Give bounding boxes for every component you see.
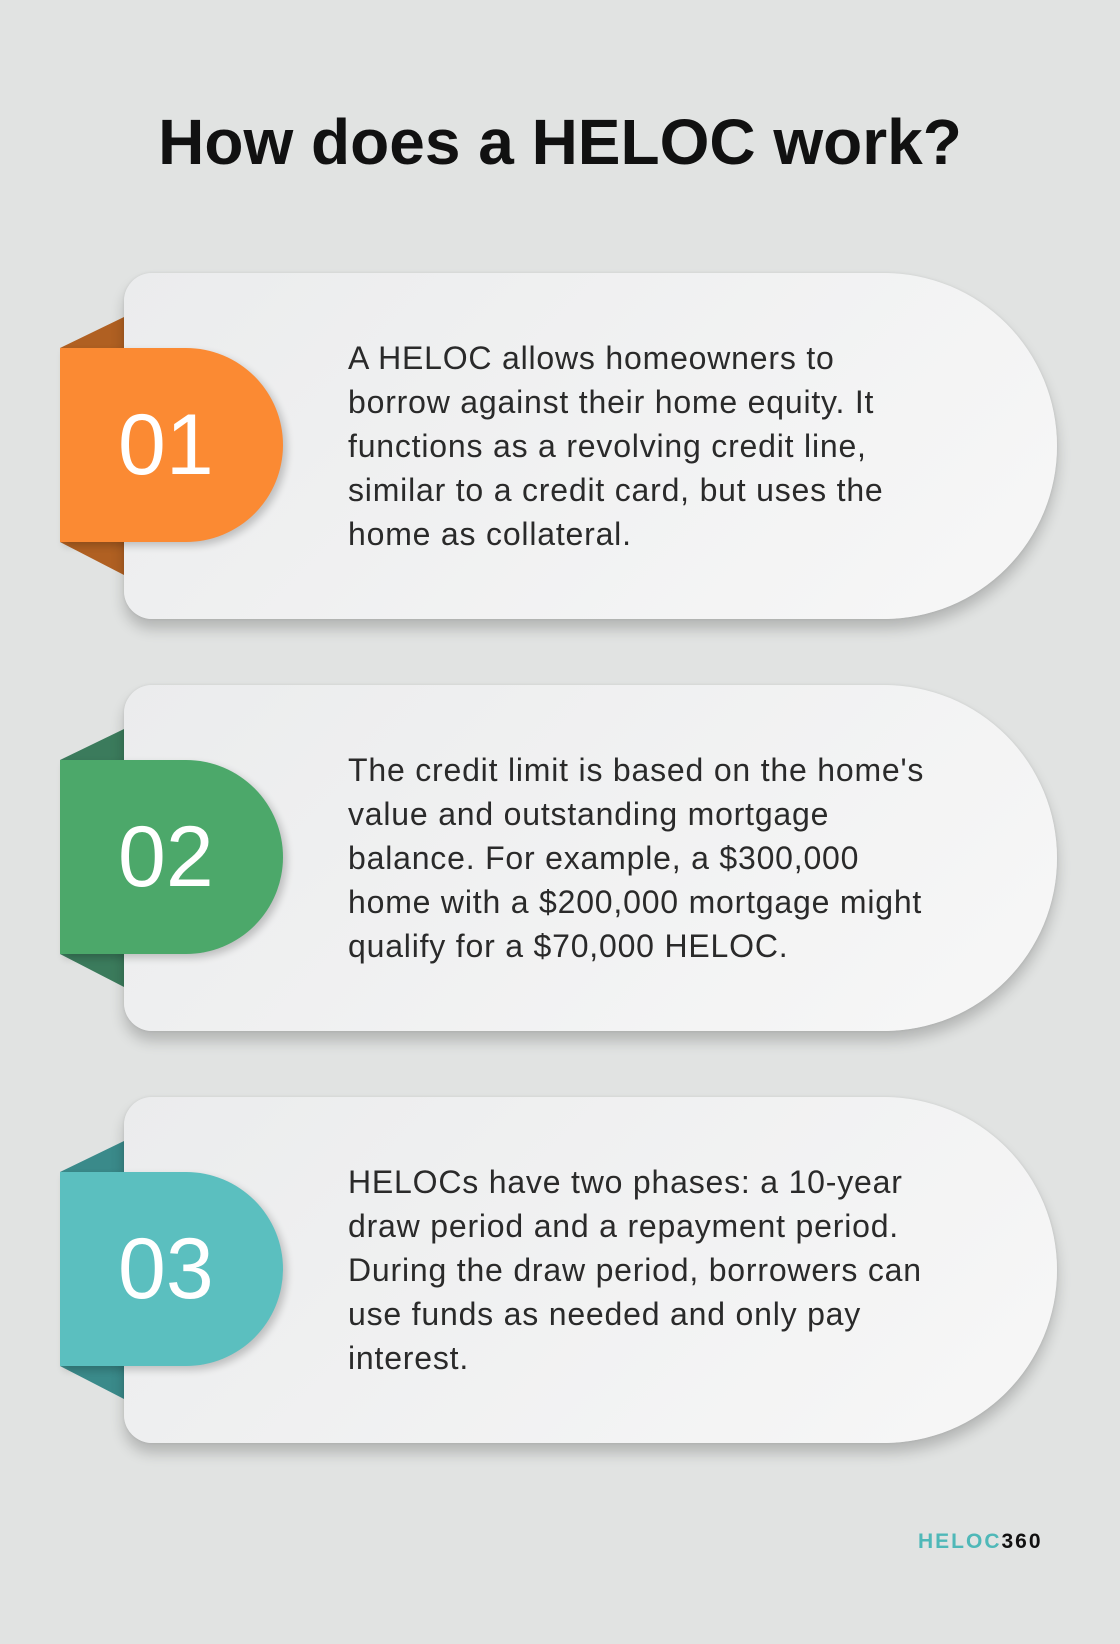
fold: step 3 xyxy=(60,1141,124,1399)
text: step 3: interest. xyxy=(348,1340,469,1376)
text: step 2: balance. For example, a $300,000 xyxy=(348,840,859,876)
panel: step 2 xyxy=(60,684,1062,1047)
panel: step 1 xyxy=(60,272,1062,635)
text: step 2: qualify for a $70,000 HELOC. xyxy=(348,928,788,964)
text: step 1: home as collateral. xyxy=(348,516,632,552)
text: step 1 xyxy=(348,340,884,552)
text: step 2: The credit limit is based on the home's xyxy=(348,752,924,788)
fold: step 1 xyxy=(60,317,124,575)
text: step 3 xyxy=(348,1164,922,1376)
badge: 02 xyxy=(60,760,283,954)
text: step 1: functions as a revolving credit line, xyxy=(348,428,867,464)
text: step 3: During the draw period, borrowers can xyxy=(348,1252,922,1288)
card: step 3 xyxy=(124,1097,1057,1443)
text: step 1: borrow against their home equity. It xyxy=(348,384,874,420)
fold: step 2 xyxy=(60,729,124,987)
badge: 01: 01 xyxy=(118,397,214,493)
text: step 3: draw period and a repayment period. xyxy=(348,1208,899,1244)
title: How does a HELOC work? xyxy=(158,106,962,178)
badge: 02: 02 xyxy=(118,809,214,905)
text: step 3: use funds as needed and only pay xyxy=(348,1296,861,1332)
card: step 1 xyxy=(124,273,1057,619)
text: step 2 xyxy=(348,752,924,964)
badge: 03 xyxy=(60,1172,283,1366)
panel: step 3 xyxy=(60,1096,1062,1459)
badge: 01 xyxy=(60,348,283,542)
badge: 03: 03 xyxy=(118,1221,214,1317)
logo: HELOC360 xyxy=(918,1530,1043,1553)
text: step 2: home with a $200,000 mortgage might xyxy=(348,884,922,920)
text: step 1: A HELOC allows homeowners to xyxy=(348,340,835,376)
text: step 3: HELOCs have two phases: a 10-year xyxy=(348,1164,903,1200)
text: step 2: value and outstanding mortgage xyxy=(348,796,829,832)
text: step 1: similar to a credit card, but uses the xyxy=(348,472,884,508)
card: step 2 xyxy=(124,685,1057,1031)
